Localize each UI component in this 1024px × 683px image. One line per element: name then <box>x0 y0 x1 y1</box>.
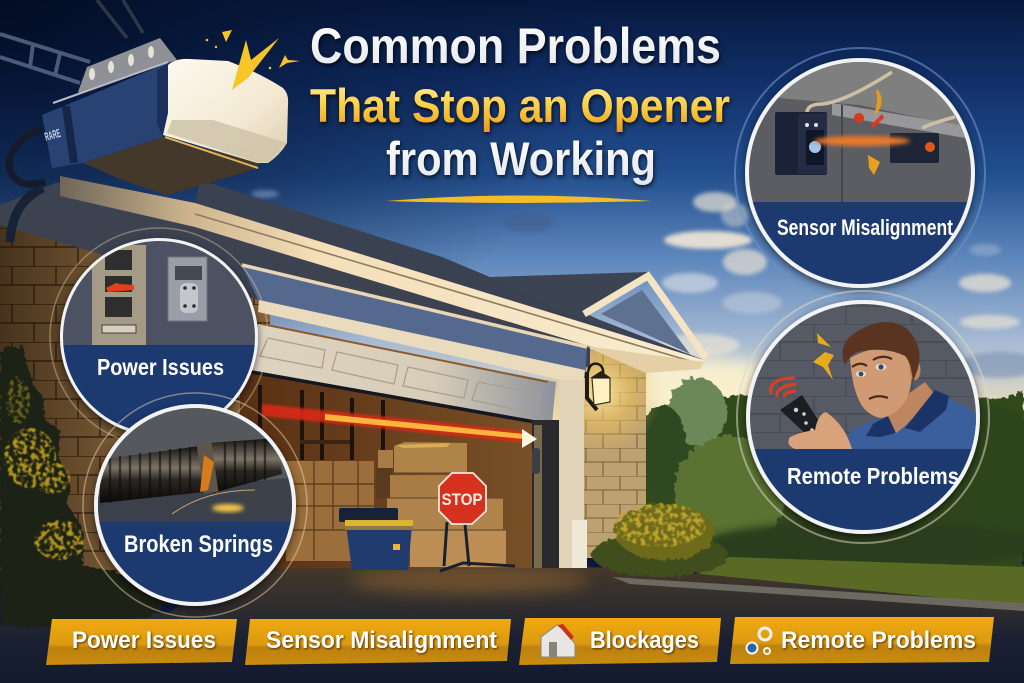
stop sign <box>439 473 515 571</box>
main roof shingles <box>195 180 704 362</box>
gold strip <box>165 137 258 168</box>
circle: Broken Springs <box>83 393 307 617</box>
left sensor <box>775 112 827 175</box>
broken spring <box>100 438 282 503</box>
circle: Power Issues <box>50 228 268 446</box>
main fascia <box>60 176 704 368</box>
soffit <box>0 182 590 368</box>
door panels <box>260 338 540 414</box>
button: Remote Problems <box>730 617 994 664</box>
white cover <box>163 59 288 163</box>
eyes <box>856 364 886 377</box>
label: Power Issues <box>97 354 224 380</box>
button: Power Issues: Power Issues <box>72 627 216 654</box>
eave return <box>586 346 704 373</box>
lightning spark icon <box>206 30 300 90</box>
thin cream trim <box>242 265 587 347</box>
man <box>843 322 980 449</box>
breaker panel icon <box>92 245 146 345</box>
gable siding <box>601 290 690 354</box>
housing label: RARE <box>43 126 62 144</box>
sparks <box>172 490 255 514</box>
left cables <box>9 128 45 184</box>
icon: house <box>541 624 575 657</box>
signal waves <box>771 378 796 397</box>
background: evening sky <box>0 0 1024 420</box>
orange door line <box>262 324 548 382</box>
fascia shadow line <box>195 214 700 364</box>
motor housing <box>42 62 170 168</box>
button: Blockages <box>519 618 721 665</box>
gable trim <box>584 276 706 358</box>
bolts <box>813 333 834 380</box>
trees and grass at right <box>640 378 1024 604</box>
plate holes <box>89 46 154 80</box>
ear <box>910 363 920 380</box>
navy band <box>752 202 968 284</box>
collar <box>866 390 949 437</box>
title line 3: from Working <box>386 132 656 185</box>
gable roof <box>490 272 649 340</box>
button: Sensor Misalignment: Sensor Misalignment <box>266 627 497 654</box>
button: Blockages: Blockages <box>590 627 699 654</box>
sensor on jamb <box>532 448 540 474</box>
clouds <box>251 190 1024 378</box>
button: Remote Problems: Remote Problems <box>781 627 976 654</box>
drop arm <box>10 188 43 242</box>
housing seam <box>66 106 74 163</box>
driveway <box>0 562 1024 683</box>
hand <box>788 412 852 449</box>
navy band <box>100 522 290 602</box>
title line 2: That Stop an Opener <box>310 79 730 132</box>
beam <box>814 136 910 146</box>
title <box>310 18 730 203</box>
mounting plate <box>78 38 177 93</box>
button: Power Issues <box>46 619 237 665</box>
label: Remote Problems <box>787 463 959 489</box>
ledge <box>832 104 966 138</box>
left tree <box>0 345 170 628</box>
garage door <box>248 324 556 424</box>
house <box>0 176 706 575</box>
stop sign: STOP <box>442 490 482 509</box>
housing top rim <box>53 62 168 103</box>
gold swoosh <box>386 196 651 203</box>
white box at column base <box>572 520 587 568</box>
blue fascia under soffit <box>242 265 587 378</box>
brick wall left <box>0 225 270 575</box>
warning marks <box>854 90 884 175</box>
face <box>850 348 912 418</box>
bush <box>592 503 728 577</box>
outlet box icon <box>168 257 207 321</box>
circle: Remote Problems <box>737 291 989 543</box>
rail <box>0 34 90 83</box>
wall shading <box>0 225 270 575</box>
navy band <box>754 449 972 530</box>
neck <box>888 382 933 434</box>
lamp glow on pier <box>538 330 662 454</box>
label: Sensor Misalignment <box>777 215 954 240</box>
sensor cable <box>807 72 955 128</box>
trim column <box>559 380 584 568</box>
circle: Sensor Misalignment <box>735 48 985 298</box>
ceiling <box>778 62 961 126</box>
garage door opener <box>0 0 288 242</box>
button: Sensor Misalignment <box>245 619 511 665</box>
red sensor beam with arrow <box>262 404 537 448</box>
underside <box>83 137 260 195</box>
right sensor <box>890 133 939 163</box>
cover lower facet <box>167 120 287 162</box>
door header band <box>258 300 585 385</box>
title line 1: Common Problems <box>310 18 721 74</box>
hanger strap <box>97 0 143 38</box>
navy band <box>63 345 255 428</box>
label: Broken Springs <box>124 531 273 558</box>
wall lamp <box>587 364 611 410</box>
door bottom rail <box>246 371 552 425</box>
hair <box>843 322 920 382</box>
brick pier right <box>583 350 646 558</box>
housing front band <box>157 62 170 137</box>
remote <box>780 395 818 432</box>
interior rack <box>260 385 383 470</box>
storage bin <box>339 508 413 570</box>
brows and mouth <box>852 357 892 399</box>
door jamb <box>532 420 559 568</box>
icon: gears <box>746 628 771 654</box>
garage interior <box>240 368 552 568</box>
stacked boxes <box>286 442 506 567</box>
polo shirt <box>849 398 976 449</box>
